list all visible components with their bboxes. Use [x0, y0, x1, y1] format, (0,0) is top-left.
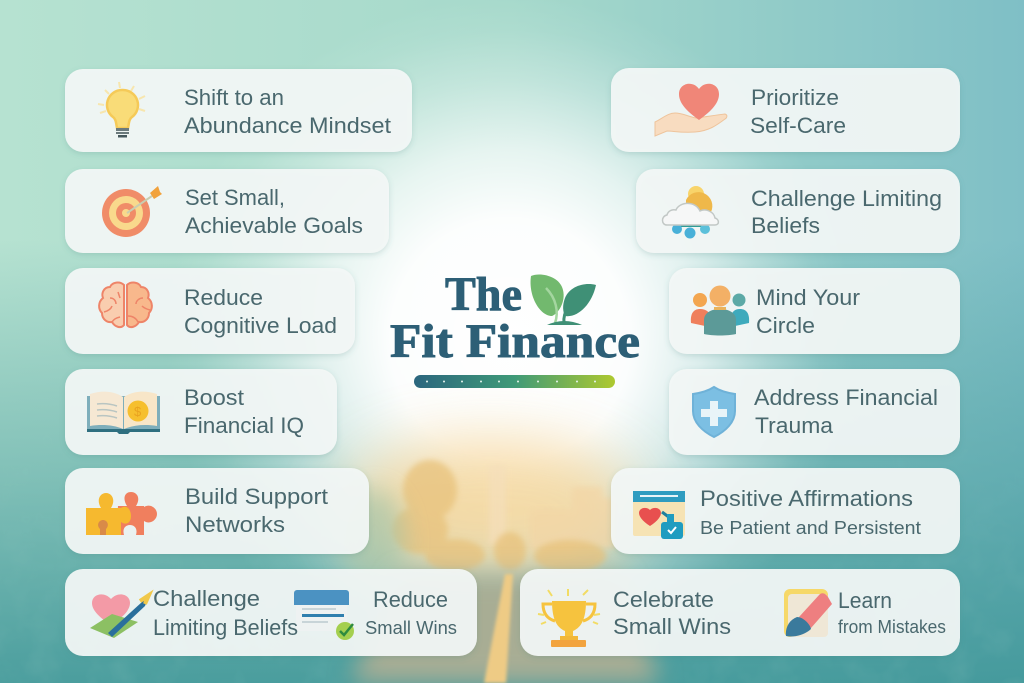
icon: sun behind cloud with drops: [662, 186, 718, 238]
panel: Positive Affirmations: [611, 468, 960, 554]
text: Limiting Beliefs: [153, 615, 298, 640]
text: Financial IQ: [184, 413, 304, 438]
symbol: coin dollar: $: [134, 404, 142, 419]
icon: puzzle pieces: [86, 492, 157, 535]
text: [756, 285, 860, 338]
text: Shift to an: [184, 85, 284, 110]
text: Trauma: [755, 413, 834, 438]
text: Boost: [184, 385, 244, 410]
text: [184, 85, 391, 138]
text: from Mistakes: [838, 617, 946, 637]
icon: leaf sprout: [531, 275, 596, 325]
text: Set Small,: [185, 185, 285, 210]
icon: shield with cross: [693, 387, 735, 437]
text: Be Patient and Persistent: [700, 518, 921, 538]
icon: open book with coin: [87, 392, 160, 434]
text: [184, 385, 304, 438]
text: [838, 588, 946, 637]
panel: Mind Your Circle: [669, 268, 960, 354]
panel: Address Financial Trauma: [669, 369, 960, 455]
text: [153, 586, 298, 640]
text: Celebrate: [613, 587, 714, 612]
text: Learn: [838, 588, 892, 613]
icon: brain: [99, 283, 152, 327]
text: Reduce: [184, 285, 263, 310]
panel: Reduce Cognitive Load: [65, 268, 355, 354]
title: Fit Finance: Fit Finance: [390, 315, 640, 368]
text: Beliefs: [751, 213, 820, 238]
panel: Celebrate Small Wins and Learn from Mistakes: [520, 569, 960, 656]
icon: group of people: [691, 286, 749, 336]
text: [184, 285, 337, 338]
text: Prioritize: [751, 85, 839, 110]
icon: trophy: [538, 589, 600, 647]
text: Small Wins: [365, 618, 457, 638]
panel: Prioritize Self-Care: [611, 68, 960, 152]
text: Small Wins: [613, 614, 731, 639]
text: [185, 185, 363, 238]
panel: Build Support Networks: [65, 468, 369, 554]
title: The: The: [445, 268, 522, 321]
text: Circle: [756, 313, 815, 338]
text: Positive Affirmations: [700, 486, 913, 511]
panel: Shift to an Abundance Mindset: [65, 69, 412, 152]
icon: eraser and brush: [784, 589, 832, 637]
text: [751, 186, 942, 238]
road: [350, 574, 660, 683]
icon: hand holding heart: [655, 84, 727, 136]
text: [185, 484, 328, 537]
text: Reduce: [373, 587, 448, 612]
text: Mind Your: [756, 285, 860, 310]
text: Build Support: [185, 484, 328, 509]
text: Self-Care: [750, 113, 846, 138]
text: Abundance Mindset: [184, 113, 391, 138]
text: Address Financial: [754, 385, 938, 410]
panel: Set Small, Achievable Goals: [65, 169, 389, 253]
text: Achievable Goals: [185, 213, 363, 238]
text: [613, 587, 731, 639]
icon: target with arrow: [102, 186, 162, 237]
panel: Boost Financial IQ: [65, 369, 337, 455]
panel: Challenge Limiting Beliefs: [636, 169, 960, 253]
gradient bar: [414, 375, 615, 388]
text: Challenge Limiting: [751, 186, 942, 211]
panel: Challenge Limiting Beliefs and Reduce Small Wins: [65, 569, 477, 656]
text: [754, 385, 938, 438]
text: Networks: [185, 512, 285, 537]
icon: calendar with check: [294, 590, 354, 640]
text: [750, 85, 846, 138]
title block: The Fit Finance: [390, 268, 640, 388]
text: Challenge: [153, 586, 260, 611]
text: Cognitive Load: [184, 313, 337, 338]
text: [700, 486, 921, 538]
icon: light bulb: [98, 82, 145, 138]
text: [365, 587, 457, 638]
icon: heart and pencil: [90, 594, 149, 638]
icon: calendar with heart and hand: [633, 491, 685, 539]
